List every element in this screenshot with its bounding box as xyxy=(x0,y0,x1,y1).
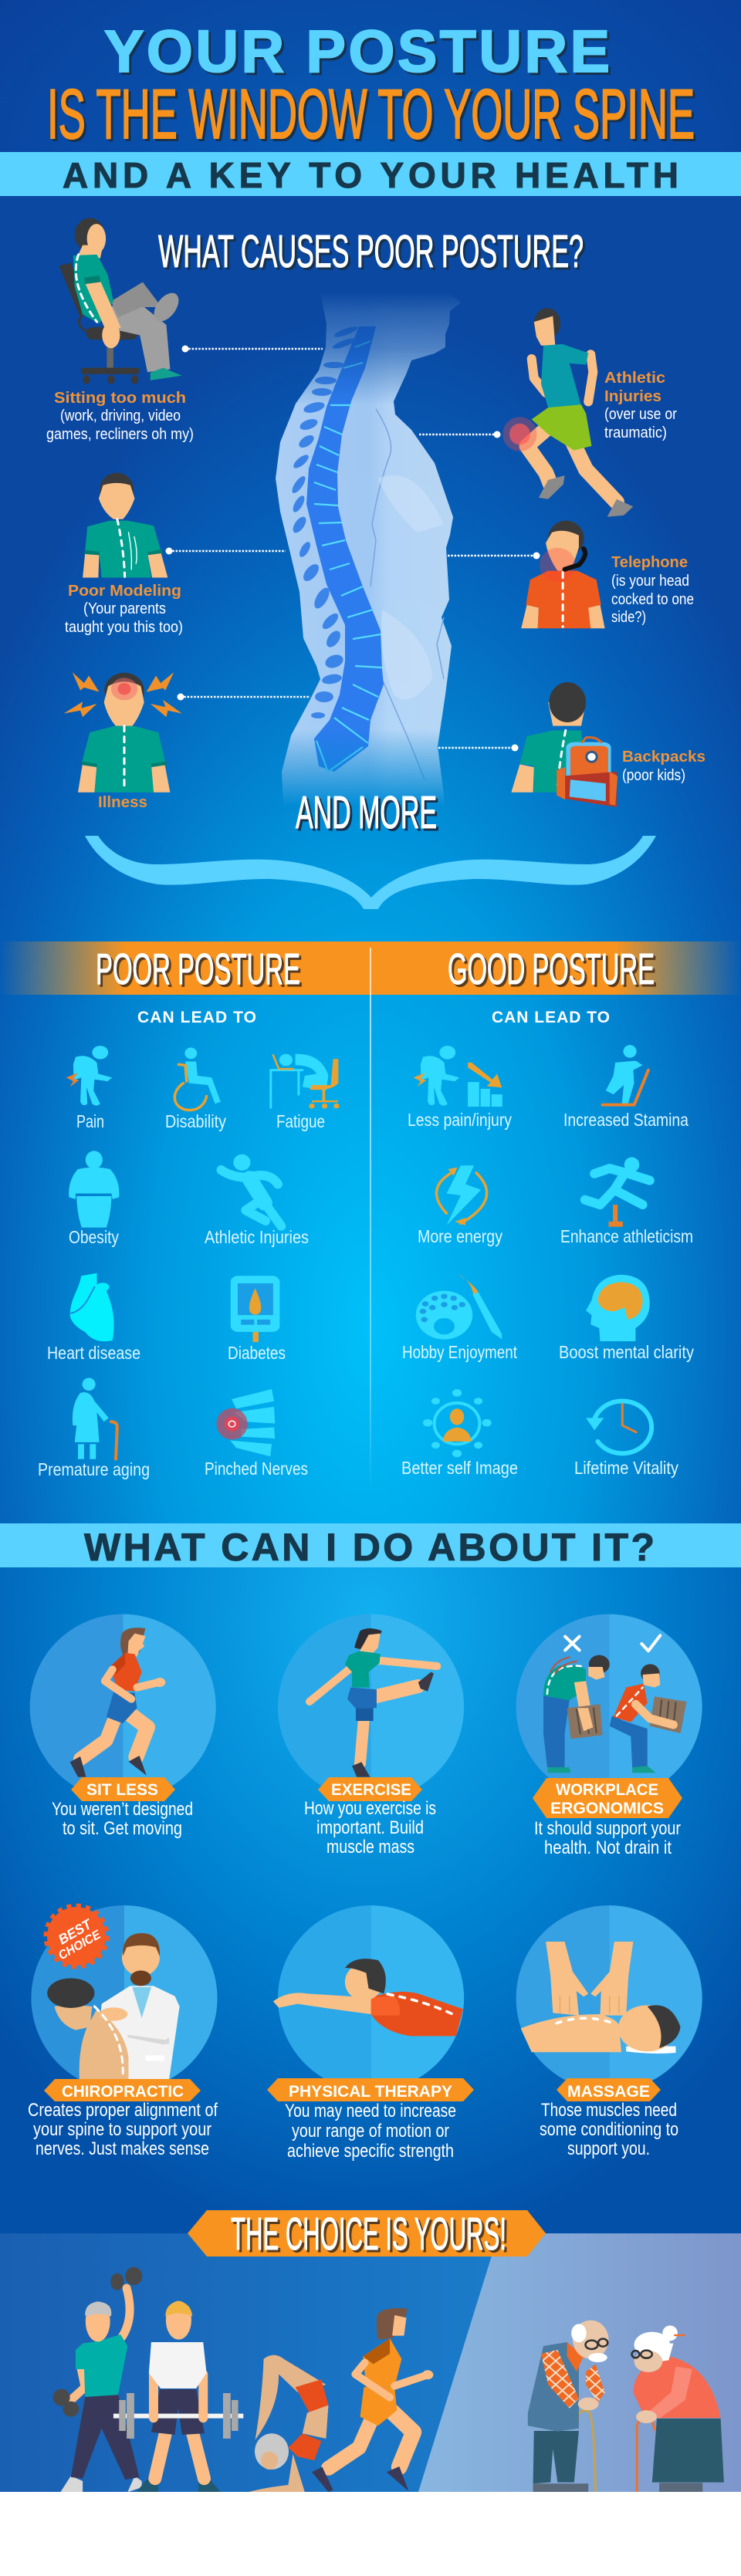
label: Pain xyxy=(76,1111,104,1131)
heading: and more: AND MORE xyxy=(296,787,437,838)
description line 3: muscle mass xyxy=(327,1837,414,1858)
item: hobby xyxy=(402,1274,517,1362)
item: athletic injuries xyxy=(205,1154,309,1247)
item: diabetes xyxy=(228,1276,286,1363)
active side background xyxy=(0,2233,741,2492)
label: More energy xyxy=(418,1226,502,1246)
item: pain xyxy=(66,1046,112,1131)
background: what can I do xyxy=(0,1523,741,2241)
label: Increased Stamina xyxy=(563,1110,689,1130)
panel: the choice is yours xyxy=(0,2209,741,2494)
label hexagon xyxy=(318,1777,422,1801)
item: self image xyxy=(401,1389,518,1478)
connector: athletic xyxy=(419,431,500,438)
item: fatigue xyxy=(271,1054,340,1131)
hexagon banner xyxy=(188,2209,546,2260)
old man xyxy=(528,2321,609,2492)
orange runner xyxy=(312,2308,433,2492)
description: Creates proper alignment of xyxy=(28,2100,218,2121)
label hexagon: CHIROPRACTIC xyxy=(62,2083,184,2101)
label: Obesity xyxy=(69,1227,119,1247)
item: obesity xyxy=(69,1151,119,1247)
subheading: CAN LEAD TO xyxy=(137,1009,256,1026)
label: sitting too much: Sitting too much xyxy=(54,390,186,407)
description line 3: support you. xyxy=(567,2138,650,2159)
icon: child with backpack xyxy=(511,682,618,807)
background: header xyxy=(0,0,741,313)
label hexagon: EXERCISE xyxy=(331,1781,411,1799)
card: massage xyxy=(516,1905,702,2159)
subtitle band xyxy=(0,152,741,196)
badge: best choice: BEST xyxy=(56,1915,96,1948)
label: poor modeling: Poor Modeling xyxy=(68,583,181,600)
illustration: aging couple xyxy=(528,2321,724,2492)
anatomical torso with spine xyxy=(276,292,461,806)
illustration: man doing back extension xyxy=(273,1905,464,2091)
label: athletic: Athletic xyxy=(604,370,665,387)
label: Fatigue xyxy=(276,1111,325,1131)
label hexagon xyxy=(557,2078,661,2101)
item: athleticism xyxy=(560,1158,693,1246)
brace xyxy=(85,836,656,909)
description line 3: side?) xyxy=(611,609,646,626)
label: Less pain/injury xyxy=(408,1110,512,1130)
lightning bolts xyxy=(64,672,182,717)
illustration: chiropractor with patient xyxy=(31,1905,218,2091)
description: How you exercise is xyxy=(304,1798,436,1819)
description line 2: to sit. Get moving xyxy=(63,1818,182,1839)
icon: man with phone xyxy=(521,521,605,628)
label hexagon: WORKPLACE xyxy=(556,1781,658,1799)
panel: good posture outcomes xyxy=(401,1009,694,1478)
panel: poor posture outcomes xyxy=(38,1009,340,1479)
label: illness: Illness xyxy=(98,794,147,811)
item: heart disease xyxy=(47,1273,140,1363)
description: Those muscles need xyxy=(541,2100,677,2121)
item: disability xyxy=(165,1048,226,1131)
label hexagon xyxy=(267,2078,474,2101)
footer white space xyxy=(0,2492,741,2576)
label: Hobby Enjoyment xyxy=(402,1342,517,1362)
banner text: THE CHOICE IS YOURS! xyxy=(231,2209,506,2260)
cause: athletic injuries xyxy=(502,308,677,517)
connector: modeling xyxy=(165,548,286,554)
description line 2: your spine to support your xyxy=(33,2119,211,2140)
label: backpacks: Backpacks xyxy=(622,749,705,766)
connector: backpacks xyxy=(438,744,519,752)
label: Pinched Nerves xyxy=(205,1459,308,1479)
icon: man in teal shirt xyxy=(83,473,167,577)
card: chiropractic xyxy=(28,1905,218,2159)
check mark xyxy=(641,1635,660,1651)
label: Enhance athleticism xyxy=(560,1226,693,1246)
label hexagon: ERGONOMICS xyxy=(550,1800,664,1817)
cause: illness xyxy=(64,672,182,811)
label: injuries: Injuries xyxy=(604,388,661,405)
icon: man in office chair xyxy=(59,218,184,384)
description line 2: important. Build xyxy=(316,1817,424,1838)
description line 2: taught you this too) xyxy=(65,619,183,636)
label hexagon xyxy=(71,1777,175,1801)
label: Diabetes xyxy=(228,1343,286,1363)
item: stamina xyxy=(563,1045,689,1130)
title block xyxy=(47,19,695,154)
icon: man with headache xyxy=(64,672,182,793)
description: (is your head xyxy=(611,573,689,590)
label hexagon: MASSAGE xyxy=(567,2083,650,2101)
label hexagon xyxy=(44,2079,201,2101)
card: workplace ergonomics xyxy=(516,1614,702,1858)
description: You weren’t designed xyxy=(52,1799,193,1820)
description: (Your parents xyxy=(83,600,166,617)
cause: telephone xyxy=(521,521,694,628)
card: physical therapy xyxy=(267,1905,474,2162)
connector: sitting xyxy=(182,346,323,352)
description: It should support your xyxy=(534,1818,681,1839)
label: Boost mental clarity xyxy=(559,1342,694,1362)
description line 2: cocked to one xyxy=(611,591,694,608)
connector: telephone xyxy=(448,553,540,559)
label: Athletic Injuries xyxy=(205,1227,309,1247)
spinal discs xyxy=(314,341,382,772)
subheading: CAN LEAD TO xyxy=(492,1009,610,1026)
section band: what can I do xyxy=(0,1523,741,1569)
item: premature aging xyxy=(38,1378,150,1479)
illustration: back massage xyxy=(516,1905,702,2091)
old woman xyxy=(632,2325,724,2492)
description line 2: health. Not drain it xyxy=(544,1837,672,1858)
label: Premature aging xyxy=(38,1459,150,1479)
description line 3: nerves. Just makes sense xyxy=(36,2138,209,2159)
cause: backpacks xyxy=(511,682,705,807)
label: telephone: Telephone xyxy=(611,554,688,571)
panel: poor vs good band xyxy=(0,941,741,995)
label hexagon: PHYSICAL THERAPY xyxy=(289,2083,452,2101)
description: (over use or xyxy=(604,406,677,423)
description: (work, driving, video xyxy=(60,407,181,424)
dumbbell man xyxy=(53,2267,142,2492)
label: Disability xyxy=(165,1111,226,1131)
illustration: woman running xyxy=(30,1614,216,1800)
description line 2: some conditioning to xyxy=(540,2119,678,2140)
heading: WHAT CAN I DO ABOUT IT? xyxy=(84,1526,655,1569)
description: (poor kids) xyxy=(622,767,685,784)
card: exercise xyxy=(278,1614,464,1858)
body silhouette xyxy=(276,292,461,806)
card: sit less xyxy=(30,1614,216,1839)
spine vertebrae xyxy=(306,326,384,772)
shoulder and abdomen shading xyxy=(370,409,444,779)
badge: best choice xyxy=(47,1907,106,1966)
description line 2: traumatic) xyxy=(604,424,667,441)
item: pinched nerves xyxy=(205,1389,308,1479)
cross mark xyxy=(565,1637,580,1650)
illustration: active seniors xyxy=(53,2267,433,2494)
description line 3: achieve specific strength xyxy=(287,2141,454,2162)
illustration: woman stretching xyxy=(278,1614,464,1800)
item: vitality xyxy=(574,1401,678,1478)
description line 2: games, recliners oh my) xyxy=(46,426,194,443)
barbell man xyxy=(113,2301,243,2494)
label hexagon xyxy=(533,1778,682,1818)
cause: poor modeling xyxy=(65,473,183,636)
aging side background xyxy=(418,2233,741,2492)
background: causes and outcomes xyxy=(0,152,741,1533)
label: Heart disease xyxy=(47,1343,140,1363)
connector: illness xyxy=(178,693,310,701)
item: mental clarity xyxy=(559,1275,694,1362)
badge: best choice: CHOICE xyxy=(56,1928,104,1962)
subtitle text: AND A KEY TO YOUR HEALTH xyxy=(63,155,678,195)
label hexagon: SIT LESS xyxy=(86,1781,158,1799)
description: You may need to increase xyxy=(285,2101,456,2121)
backbend woman xyxy=(248,2355,328,2492)
item: less pain xyxy=(408,1046,512,1130)
icon: injured runner xyxy=(502,308,633,517)
illustration: lifting wrong and right xyxy=(516,1614,702,1800)
title line 1: YOUR POSTURE xyxy=(104,19,610,85)
label: Better self Image xyxy=(401,1458,518,1478)
divider xyxy=(370,948,371,1492)
item: more energy xyxy=(418,1165,502,1246)
label: Lifetime Vitality xyxy=(574,1458,678,1478)
spinous processes xyxy=(289,325,358,718)
description line 2: your range of motion or xyxy=(292,2121,449,2142)
heading: poor posture: POOR POSTURE xyxy=(96,945,300,994)
cause: sitting too much xyxy=(46,218,194,443)
